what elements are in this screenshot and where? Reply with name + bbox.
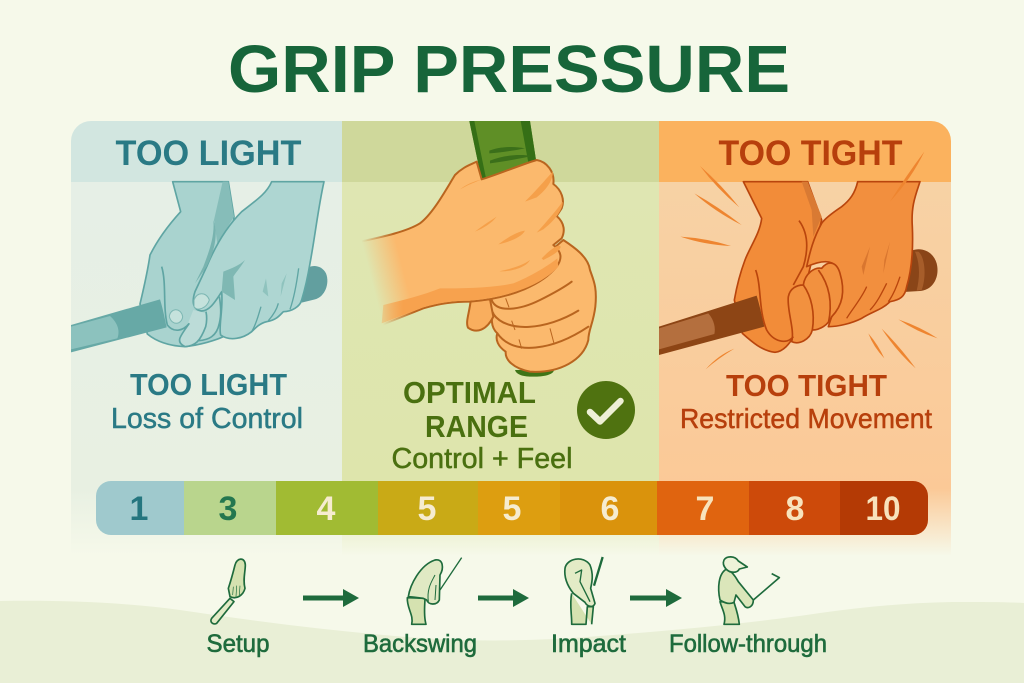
- illustration: loose hands on club: [71, 182, 327, 352]
- pressure scale bar: 1: [130, 490, 148, 528]
- header band: optimal: [342, 121, 659, 182]
- step label: impact: Impact: [551, 630, 626, 658]
- step label: follow-through: Follow-through: [669, 630, 827, 658]
- panel: too tight: [659, 121, 951, 556]
- label: range: RANGE: [425, 409, 528, 444]
- pressure scale bar: [96, 481, 928, 535]
- pressure scale bar: 10: [866, 490, 900, 528]
- pressure scale bar: 4: [317, 490, 336, 528]
- pressure scale bar: 3: [219, 490, 237, 528]
- title: GRIP PRESSURE: [228, 32, 790, 107]
- header band: too tight: [659, 121, 951, 182]
- illustration: tight hands on club: [659, 152, 938, 369]
- heading: too tight: TOO TIGHT: [718, 134, 902, 173]
- step label: backswing: Backswing: [363, 630, 477, 658]
- arrow: impact to follow-through: [630, 589, 682, 607]
- step label: setup: Setup: [206, 630, 270, 658]
- icon: check mark badge: [577, 381, 635, 439]
- pressure scale bar: 5: [503, 490, 521, 528]
- pressure scale bar: 7: [696, 490, 714, 528]
- panel: optimal range: [342, 121, 659, 556]
- icon: backswing: [407, 558, 462, 624]
- background hill: [0, 601, 1024, 683]
- arrow: setup to backswing: [303, 589, 359, 607]
- icon: impact: [565, 557, 603, 624]
- description: restricted movement: Restricted Movement: [680, 403, 932, 434]
- arrow: backswing to impact: [478, 589, 529, 607]
- label: too tight: TOO TIGHT: [726, 368, 887, 403]
- illustration: correct grip: [360, 121, 596, 377]
- label: optimal: OPTIMAL: [403, 375, 536, 410]
- pressure scale bar: 8: [786, 490, 804, 528]
- description: loss of control: Loss of Control: [111, 403, 303, 435]
- panel: too light: [71, 121, 342, 556]
- header band: too light: [71, 121, 342, 182]
- label: too light: TOO LIGHT: [130, 367, 287, 402]
- pressure scale bar: 5: [418, 490, 436, 528]
- description: control + feel: Control + Feel: [392, 443, 572, 475]
- icon: follow-through: [719, 557, 779, 624]
- icon: setup: [211, 559, 245, 624]
- pressure scale bar: 6: [601, 490, 619, 528]
- heading: too light: TOO LIGHT: [116, 134, 302, 173]
